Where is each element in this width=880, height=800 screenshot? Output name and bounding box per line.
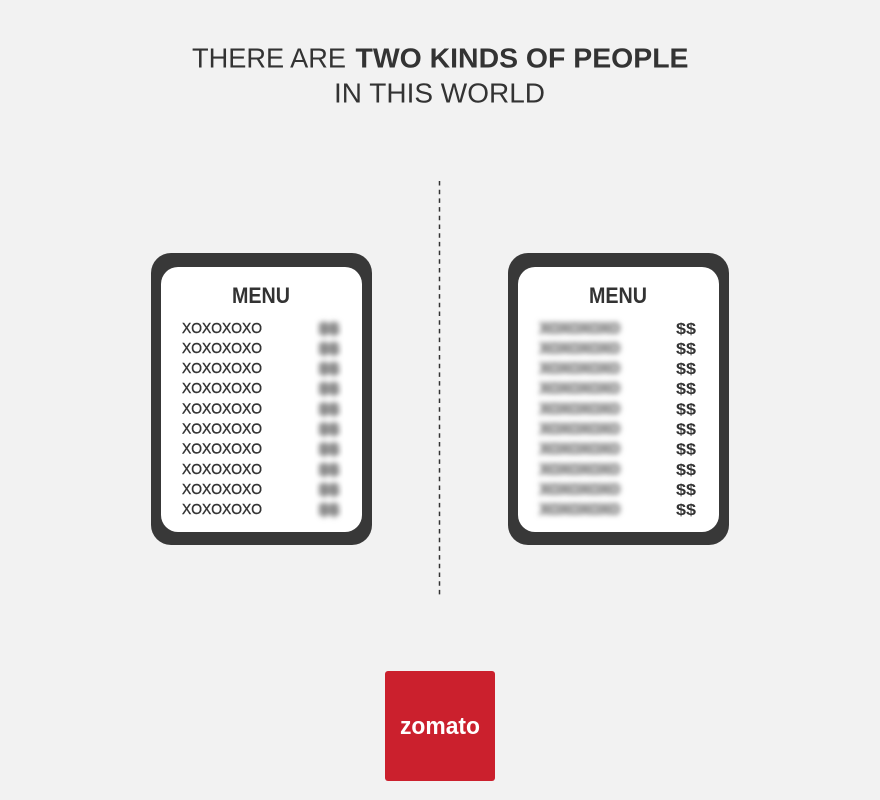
left menu item names: XOXOXOXO (182, 420, 262, 438)
left menu blurred prices: $$ (319, 482, 339, 499)
right menu blurred item names: XOXOXOXO (540, 340, 620, 357)
right menu prices: $$ (676, 442, 696, 458)
right menu prices: $$ (676, 341, 696, 358)
right menu prices: $$ (676, 502, 696, 519)
panel: right menu, items blurred and prices sharp (508, 253, 729, 545)
title: THERE ARE (192, 42, 346, 74)
right menu blurred item names: XOXOXOXO (540, 461, 620, 478)
left menu blurred prices: $$ (319, 402, 339, 418)
right menu prices: $$ (676, 361, 696, 378)
right menu blurred item names: XOXOXOXO (540, 440, 620, 458)
panel: left menu, items sharp and prices blurred (151, 253, 372, 545)
right menu blurred item names: XOXOXOXO (540, 360, 620, 377)
left menu heading: MENU (232, 283, 290, 308)
left menu blurred prices: $$ (319, 442, 339, 458)
title: TWO KINDS OF PEOPLE (356, 42, 688, 74)
right menu heading: MENU (589, 283, 647, 308)
logo: zomato (385, 671, 495, 781)
logo: zomato: zomato (400, 713, 480, 740)
left menu item names: XOXOXOXO (182, 400, 262, 418)
left menu item names: XOXOXOXO (182, 360, 262, 377)
left menu blurred prices: $$ (319, 422, 339, 438)
divider: dashed line (438, 181, 440, 597)
left menu item names: XOXOXOXO (182, 340, 262, 357)
left menu blurred prices: $$ (319, 361, 339, 378)
title (192, 42, 688, 108)
left menu blurred prices: $$ (319, 462, 339, 479)
left menu blurred prices: $$ (319, 341, 339, 358)
right menu blurred item names: XOXOXOXO (540, 400, 620, 418)
right menu blurred item names (540, 320, 620, 518)
right menu blurred item names: XOXOXOXO (540, 501, 620, 518)
left menu blurred prices (319, 321, 339, 519)
left menu blurred prices: $$ (319, 502, 339, 519)
right menu blurred item names: XOXOXOXO (540, 481, 620, 498)
right menu prices: $$ (676, 422, 696, 438)
right menu prices: $$ (676, 482, 696, 499)
left menu item names: XOXOXOXO (182, 461, 262, 478)
left menu item names (182, 320, 262, 518)
left menu item names: XOXOXOXO (182, 380, 262, 397)
right menu prices (676, 321, 696, 519)
right menu prices: $$ (676, 402, 696, 418)
right menu blurred item names: XOXOXOXO (540, 420, 620, 438)
title: IN THIS WORLD (334, 78, 545, 108)
left menu item names: XOXOXOXO (182, 501, 262, 518)
right menu blurred item names: XOXOXOXO (540, 380, 620, 397)
left menu item names: XOXOXOXO (182, 481, 262, 498)
right menu prices: $$ (676, 321, 696, 338)
left menu blurred prices: $$ (319, 381, 339, 398)
left menu blurred prices: $$ (319, 321, 339, 338)
right menu blurred item names: XOXOXOXO (540, 320, 620, 337)
right menu prices: $$ (676, 381, 696, 398)
left menu item names: XOXOXOXO (182, 440, 262, 458)
left menu item names: XOXOXOXO (182, 320, 262, 337)
right menu prices: $$ (676, 462, 696, 479)
